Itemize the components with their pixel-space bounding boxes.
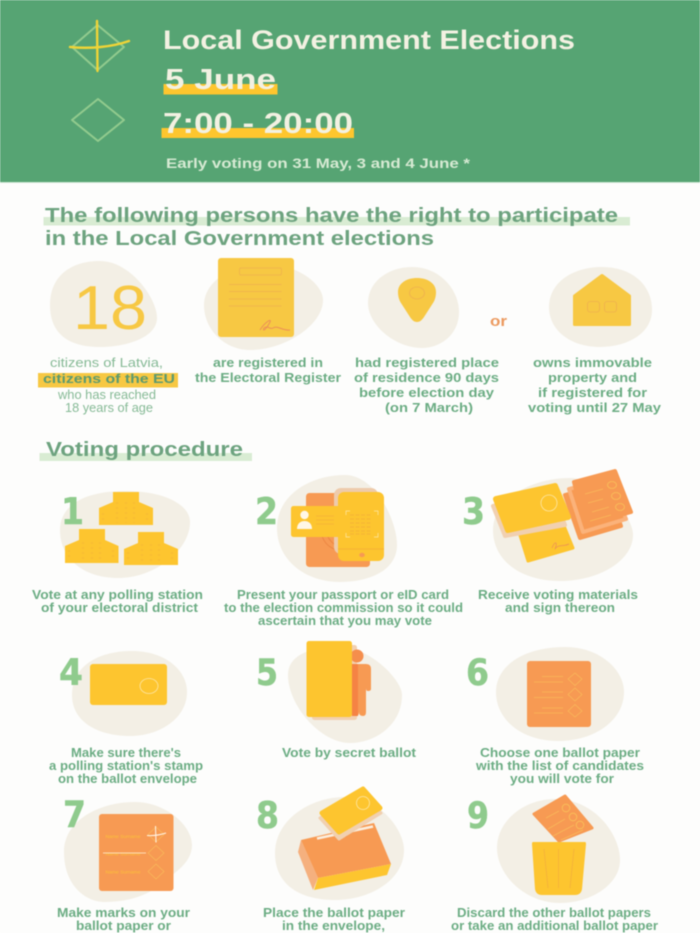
caption — [224, 588, 463, 628]
voting hours: 7:00 - 20:00 — [163, 108, 353, 140]
icon: passport, eID and phone — [291, 488, 384, 567]
number 9: 9 — [467, 794, 489, 837]
icon: empty diamond — [72, 99, 124, 141]
caption: to the election commission so it could — [224, 601, 463, 615]
panel: immovable property — [528, 267, 661, 415]
caption: on the ballot envelope — [58, 772, 197, 786]
residence text: had registered place — [355, 356, 499, 370]
citizenship text — [38, 355, 178, 415]
property text: if registered for — [538, 386, 647, 400]
caption: ascertain that you may vote — [258, 614, 432, 628]
blob — [50, 261, 157, 347]
caption: Vote by secret ballot — [282, 746, 417, 760]
caption: or take an additional ballot paper — [451, 919, 658, 933]
early voting note: Early voting on 31 May, 3 and 4 June * — [166, 155, 471, 171]
citizenship text: citizens of the EU — [43, 372, 175, 386]
panel: electoral register — [195, 258, 341, 385]
icon: voting materials — [493, 471, 631, 561]
icon: marked ballot — [99, 814, 174, 891]
icon: discarded ballot and bin — [532, 796, 592, 895]
title: Local Government Elections — [163, 25, 575, 55]
caption: a polling station's stamp — [49, 759, 203, 773]
caption: Choose one ballot paper — [480, 746, 640, 760]
icon: ballot paper — [527, 661, 591, 727]
heading: right to participate — [44, 204, 630, 250]
caption: you will vote for — [510, 772, 614, 786]
step 4 — [49, 651, 203, 786]
icon: map pin — [398, 278, 436, 322]
caption: Present your passport or eID card — [237, 588, 449, 602]
caption — [49, 746, 203, 786]
caption: Make marks on your — [57, 906, 190, 920]
caption — [57, 906, 190, 933]
step 8 — [256, 789, 405, 933]
heading: right to participate: The following persons have the right to participate — [45, 204, 618, 227]
step 5 — [256, 641, 417, 760]
property text — [528, 356, 661, 415]
residence text — [354, 356, 499, 415]
number 6: 6 — [466, 651, 489, 694]
heading: voting procedure: Voting procedure — [46, 438, 243, 461]
caption — [451, 906, 658, 933]
caption: of your electoral district — [41, 601, 199, 615]
caption — [263, 906, 405, 933]
property text: owns immovable — [533, 356, 652, 370]
panel: place of residence — [354, 267, 499, 415]
number 4: 4 — [59, 651, 83, 694]
caption: Place the ballot paper — [263, 906, 405, 920]
property text: property and — [548, 371, 637, 385]
residence text: of residence 90 days — [354, 371, 499, 385]
caption: and sign thereon — [505, 601, 615, 615]
number 18: 18 — [73, 274, 147, 343]
icon: marked ballot: Name Surname — [106, 870, 141, 874]
panel: age and citizenship — [38, 261, 178, 415]
icon: marked ballot: Name Surname — [106, 852, 141, 856]
step 6 — [466, 647, 644, 786]
residence text: before election day — [359, 386, 494, 400]
icon: polling stations — [65, 492, 178, 565]
header banner — [0, 0, 700, 183]
number 3: 3 — [462, 490, 485, 533]
register text — [195, 356, 341, 385]
property text: voting until 27 May — [528, 401, 661, 415]
number 7: 7 — [63, 793, 86, 836]
caption: Vote at any polling station — [32, 588, 203, 602]
caption: ballot paper or — [76, 919, 171, 933]
caption — [475, 746, 644, 786]
caption — [478, 588, 638, 615]
number 1: 1 — [61, 490, 84, 533]
step 3 — [462, 471, 638, 615]
number 2: 2 — [255, 490, 278, 533]
citizenship text: who has reached — [57, 387, 156, 402]
caption: Make sure there's — [71, 746, 181, 760]
election date: 5 June — [165, 64, 276, 96]
number 5: 5 — [256, 651, 278, 694]
icon: document — [218, 258, 294, 337]
residence text: (on 7 March) — [385, 401, 473, 415]
citizenship text: citizens of Latvia, — [50, 355, 163, 370]
register text: the Electoral Register — [195, 371, 341, 385]
number 8: 8 — [256, 794, 279, 837]
step 9 — [451, 794, 658, 933]
icon: ballot envelope — [90, 664, 167, 705]
caption — [32, 588, 203, 615]
or label: or — [490, 313, 507, 330]
heading: right to participate: in the Local Government elections — [45, 227, 434, 250]
step 1 — [32, 490, 203, 615]
icon: house — [574, 276, 630, 324]
icon: envelope and ballot — [298, 789, 391, 890]
icon: marked ballot: Name Surname — [106, 834, 141, 839]
caption: in the envelope, — [282, 919, 385, 933]
caption: Discard the other ballot papers — [457, 906, 651, 920]
citizenship text: 18 years of age — [65, 400, 153, 415]
icon: marked ballot diamond — [70, 21, 129, 71]
caption: with the list of candidates — [475, 759, 644, 773]
caption: Receive voting materials — [478, 588, 638, 602]
icon: voter behind ballot — [306, 641, 371, 720]
step 2 — [224, 475, 463, 628]
step 7 — [57, 793, 192, 933]
register text: are registered in — [213, 356, 323, 370]
